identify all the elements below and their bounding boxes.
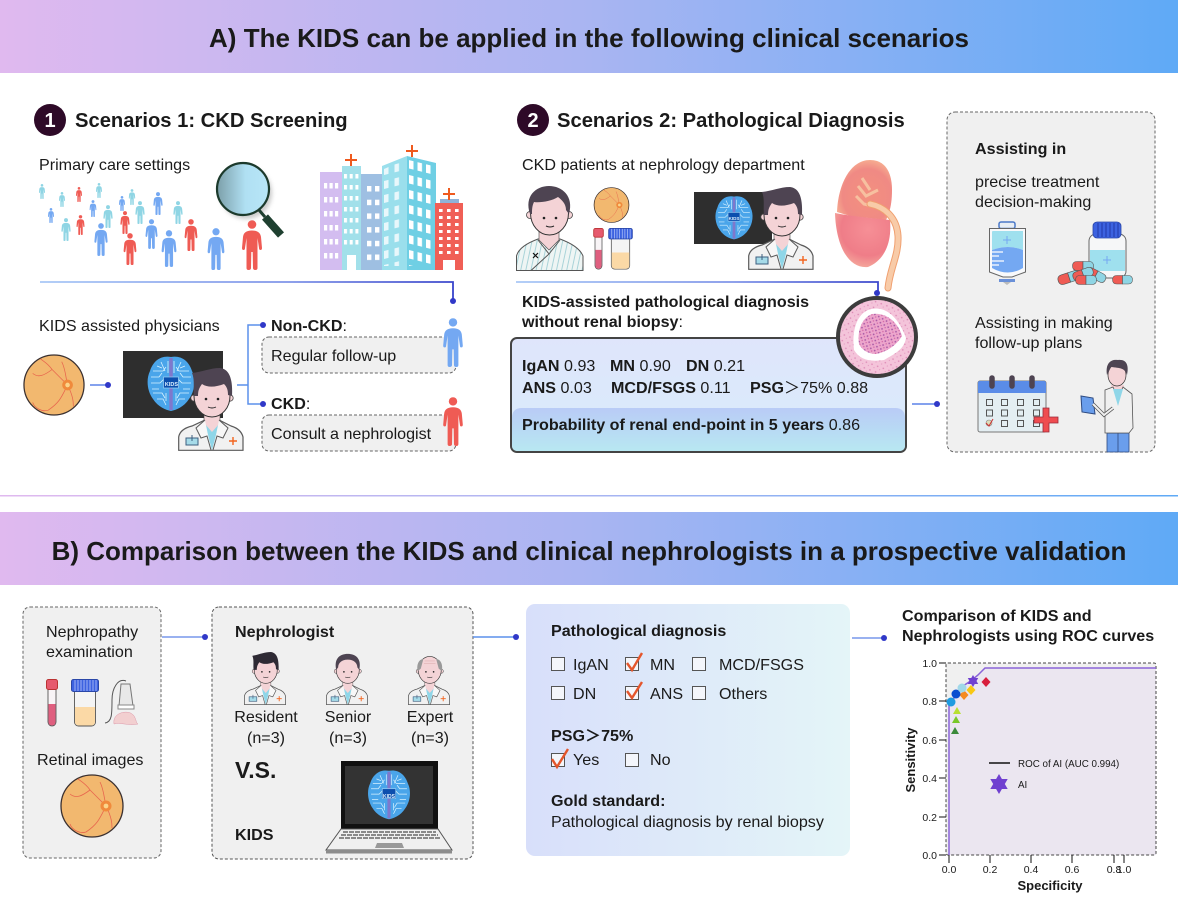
senior: Senior bbox=[325, 708, 372, 726]
icon: blood tube bbox=[46, 680, 58, 726]
icon: patient bbox=[516, 186, 583, 270]
outcome: Non-CKD bbox=[262, 317, 463, 373]
result box bbox=[511, 338, 906, 452]
icon: retina bbox=[61, 775, 123, 837]
y axis: Sensitivity bbox=[903, 727, 918, 793]
text: gold standard: Pathological diagnosis by renal biopsy bbox=[551, 813, 825, 831]
plot area bbox=[946, 663, 1156, 855]
header band B bbox=[0, 512, 1178, 585]
x axis: 0.6 bbox=[1065, 864, 1079, 876]
chart title bbox=[902, 607, 1154, 645]
icon: KIDS brain screen with physician bbox=[123, 351, 243, 450]
text: follow-up plans: follow-up plans bbox=[975, 334, 1082, 352]
y axis: 0.8 bbox=[922, 696, 937, 708]
icon: urine jar bbox=[72, 680, 98, 726]
resident: Resident bbox=[234, 708, 298, 726]
legend: ROC of AI (AUC 0.994) bbox=[1018, 759, 1119, 770]
arrow bbox=[473, 634, 519, 640]
text: nephropathy examination: examination bbox=[46, 643, 133, 661]
heading: scenario 2: Scenarios 2: Pathological Diagnosis bbox=[557, 110, 905, 132]
icon: calendar bbox=[978, 378, 1058, 432]
text: V.S.: V.S. bbox=[235, 757, 276, 783]
arrow bbox=[90, 382, 111, 388]
checkboxes: diagnosis options: Others bbox=[719, 685, 767, 703]
text: treatment decision: decision-making bbox=[975, 193, 1091, 211]
outcome: CKD bbox=[262, 395, 463, 451]
icon: ultrasound probe bbox=[105, 680, 138, 725]
end-point probability: Probability of renal end-point in 5 years 0.86 bbox=[522, 416, 860, 434]
text: primary care settings: Primary care settings bbox=[39, 156, 190, 174]
values row 1: 0.90 bbox=[635, 357, 671, 375]
text: KIDS assisted physicians: KIDS assisted physicians bbox=[39, 317, 220, 335]
outcome: CKD: Consult a nephrologist bbox=[271, 425, 432, 443]
x axis: 0.4 bbox=[1024, 864, 1038, 876]
panel: scenario 1 CKD screening bbox=[24, 104, 463, 451]
text: nephropathy examination bbox=[46, 623, 139, 661]
checkboxes: diagnosis options: ANS bbox=[650, 685, 683, 703]
values row 1: MN bbox=[610, 357, 635, 375]
text: CKD patients: CKD patients at nephrology department bbox=[522, 156, 805, 174]
values row 1: 0.93 bbox=[560, 357, 595, 375]
heading: scenario 2: 2 bbox=[527, 110, 539, 132]
checkboxes: diagnosis options: IgAN bbox=[573, 656, 609, 674]
text: KIDS-assisted pathological diagnosis: KIDS-assisted pathological diagnosis bbox=[522, 293, 809, 311]
checkboxes: diagnosis options: MN bbox=[650, 656, 675, 674]
arrow bbox=[852, 635, 887, 641]
values row 2: ＞75% 0.88 bbox=[784, 379, 868, 397]
panel: scenario 2 pathological diagnosis bbox=[511, 104, 940, 452]
values row 2: ANS bbox=[522, 379, 556, 397]
text: assisting heading: Assisting in bbox=[975, 140, 1066, 158]
checkboxes: diagnosis options: MCD/FSGS bbox=[719, 656, 804, 674]
outcome: Non-CKD: Regular follow-up bbox=[271, 347, 396, 365]
icon: KIDS screen with physician bbox=[694, 187, 813, 269]
connector: branches to outcomes bbox=[237, 322, 266, 407]
text: nephrologist: Nephrologist bbox=[235, 623, 335, 641]
values row 1: IgAN bbox=[522, 357, 560, 375]
text: PSG heading: PSG＞75% bbox=[551, 727, 633, 745]
arrow bbox=[162, 634, 208, 640]
text: gold standard bbox=[551, 792, 825, 831]
expert bbox=[407, 656, 454, 747]
text: follow-up plans: Assisting in making bbox=[975, 314, 1113, 332]
text: follow-up plans bbox=[975, 314, 1113, 352]
divider bbox=[0, 495, 1178, 496]
y axis: 0.2 bbox=[922, 812, 937, 824]
expert: Expert bbox=[407, 708, 454, 726]
text: nephropathy examination: Nephropathy bbox=[46, 623, 139, 641]
panel: nephrologist vs KIDS bbox=[212, 607, 473, 859]
icon: laptop: KIDS bbox=[383, 794, 396, 800]
chart title: Comparison of KIDS and bbox=[902, 607, 1092, 625]
panel: pathological diagnosis form bbox=[526, 604, 850, 856]
heading: scenario 1: Scenarios 1: CKD Screening bbox=[75, 110, 348, 132]
icon: glomerulus histology bbox=[838, 298, 916, 376]
y axis bbox=[903, 658, 946, 862]
icon: hospital buildings bbox=[320, 145, 463, 270]
outcome: CKD: CKD: bbox=[271, 395, 310, 413]
chart: ROC comparison bbox=[902, 607, 1156, 893]
checkboxes: diagnosis options bbox=[552, 653, 804, 703]
senior bbox=[325, 654, 372, 747]
chart title: Nephrologists using ROC curves bbox=[902, 627, 1154, 645]
icon: laptop bbox=[326, 761, 452, 854]
y axis: 0.6 bbox=[922, 735, 937, 747]
data markers bbox=[946, 675, 990, 734]
values row 1: 0.21 bbox=[709, 357, 745, 375]
header band A: A) The KIDS can be applied in the following clinical scenarios bbox=[209, 23, 969, 53]
checkboxes: PSG bbox=[552, 749, 671, 769]
text: KIDS-assisted pathological diagnosis: without renal biopsy: bbox=[521, 313, 683, 331]
resident bbox=[234, 652, 298, 747]
text: treatment decision: precise treatment bbox=[975, 173, 1100, 191]
x axis: 1.0 bbox=[1117, 864, 1131, 876]
icon: IV bag bbox=[990, 222, 1026, 285]
x axis: 0.0 bbox=[942, 864, 956, 876]
values row 1: DN bbox=[686, 357, 709, 375]
legend: AI bbox=[1018, 780, 1027, 791]
connector line bbox=[516, 282, 880, 296]
y axis: 0.4 bbox=[922, 773, 937, 785]
text: pathological diagnosis heading: Pathological diagnosis bbox=[551, 622, 726, 640]
values row 2: PSG bbox=[750, 379, 784, 397]
icon: crowd of people bbox=[39, 183, 262, 270]
resident: (n=3) bbox=[247, 729, 285, 747]
checkboxes: PSG: Yes bbox=[573, 751, 599, 769]
icon: magnifying glass bbox=[217, 163, 281, 235]
text: KIDS-assisted pathological diagnosis bbox=[521, 293, 809, 331]
expert: (n=3) bbox=[411, 729, 449, 747]
icon: KIDS screen with physician: KIDS bbox=[729, 216, 739, 221]
y axis: 0.0 bbox=[922, 850, 937, 862]
x axis: 0.8 bbox=[1107, 864, 1121, 876]
legend bbox=[989, 759, 1119, 794]
icon: physician with clipboard bbox=[1081, 360, 1133, 452]
senior: (n=3) bbox=[329, 729, 367, 747]
values row 2: 0.11 bbox=[696, 379, 731, 397]
checkboxes: PSG: No bbox=[650, 751, 671, 769]
header band A bbox=[0, 0, 1178, 73]
header band B: B) Comparison between the KIDS and clinical nephrologists in a prospective validation bbox=[52, 536, 1126, 566]
x axis: 0.2 bbox=[983, 864, 997, 876]
text: KIDS: KIDS bbox=[235, 826, 274, 844]
icon: kidney bbox=[835, 160, 898, 288]
text: retinal images: Retinal images bbox=[37, 751, 143, 769]
heading: scenario 1 bbox=[34, 104, 348, 136]
icon: medicine bottle and pills bbox=[1057, 222, 1132, 286]
outcome: Non-CKD: Non-CKD: bbox=[271, 317, 347, 335]
icon: retina and samples bbox=[594, 188, 632, 269]
icon: retina bbox=[24, 355, 84, 415]
x axis: Specificity bbox=[1017, 878, 1083, 893]
heading: scenario 2 bbox=[517, 104, 905, 136]
connector line bbox=[40, 282, 456, 304]
y axis: 1.0 bbox=[922, 658, 937, 670]
x axis bbox=[942, 855, 1131, 893]
icon: KIDS brain screen with physician: KIDS bbox=[165, 382, 178, 388]
values row 2: 0.03 bbox=[556, 379, 592, 397]
text: treatment decision bbox=[975, 173, 1100, 211]
checkboxes: diagnosis options: DN bbox=[573, 685, 596, 703]
text: gold standard: Gold standard: bbox=[551, 792, 665, 810]
heading: scenario 1: 1 bbox=[44, 110, 56, 132]
arrow bbox=[912, 401, 940, 407]
panel: nephropathy examination bbox=[23, 607, 161, 858]
panel: assisting in bbox=[947, 112, 1155, 452]
values row 2: MCD/FSGS bbox=[611, 379, 696, 397]
